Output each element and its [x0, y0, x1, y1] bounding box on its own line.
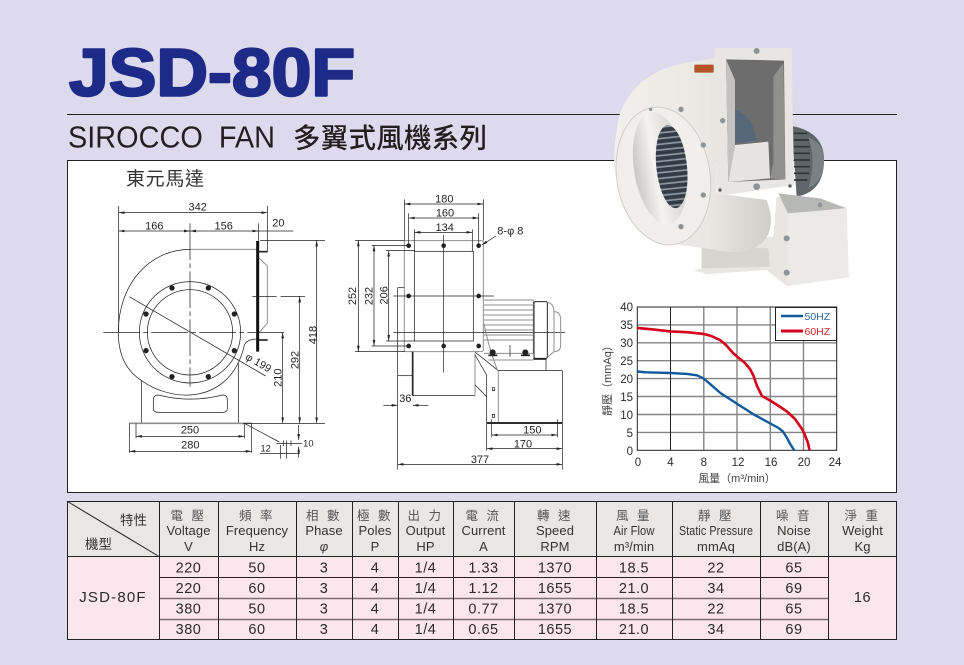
drawing: front view: 292	[289, 351, 301, 369]
legend	[776, 308, 836, 340]
header: output	[406, 509, 446, 554]
header: speed: 轉 速	[537, 508, 573, 523]
header: air flow: Air Flow	[614, 523, 655, 538]
y axis title: 靜壓（mmAq）	[600, 340, 614, 416]
header: current: A	[479, 539, 488, 554]
header: weight	[842, 508, 883, 554]
drawing: front view: 210	[272, 369, 284, 387]
row 2: 34	[707, 581, 725, 597]
curve: 60HZ	[637, 328, 810, 450]
row 3: 50	[248, 602, 266, 618]
drawing: side view: 252	[347, 287, 359, 305]
header: noise: 噪 音	[776, 508, 812, 523]
legend: 50HZ	[804, 311, 831, 323]
curve: 50HZ	[637, 372, 794, 450]
row 1: 22	[707, 560, 725, 576]
intake ring	[606, 100, 720, 252]
motor	[484, 300, 561, 371]
subtitle: SIROCCO FAN	[68, 120, 275, 154]
header: characteristic and model: 特性	[120, 513, 147, 528]
row 3	[176, 602, 803, 618]
header: characteristic and model	[85, 513, 147, 552]
heading: motor brand: 東元馬達	[126, 168, 204, 190]
row 3: 3	[320, 602, 328, 618]
row 1: 1/4	[415, 560, 436, 576]
title: JSD-80F	[69, 36, 355, 110]
header: poles: P	[371, 539, 379, 554]
header: speed: Speed	[536, 523, 574, 538]
drawing: side view: 160	[436, 208, 454, 220]
row 3: 18.5	[619, 602, 649, 618]
x axis ticks: 24	[829, 457, 842, 469]
row 3: 0.77	[468, 602, 499, 618]
row 1: 1370	[538, 560, 572, 576]
row 2: 21.0	[619, 581, 649, 597]
drawing: front view: 342	[189, 202, 207, 214]
header: weight: Kg	[854, 539, 871, 554]
row 4: 380	[176, 622, 201, 638]
header: noise	[776, 508, 812, 554]
header: output: HP	[416, 539, 435, 554]
row 3: 22	[707, 602, 725, 618]
row 4: 34	[707, 622, 725, 638]
header: noise: dB(A)	[777, 539, 811, 554]
header: static pressure	[679, 509, 753, 554]
table: specifications	[67, 501, 897, 640]
header: phase: φ	[320, 539, 329, 554]
header: voltage: Voltage	[166, 523, 211, 538]
header: poles: Poles	[358, 523, 392, 538]
row 1: 4	[371, 560, 379, 576]
row 4: 1/4	[415, 622, 436, 638]
header: characteristic and model: 機型	[85, 537, 112, 552]
row 2	[176, 581, 803, 597]
casing	[614, 57, 771, 252]
row 2: 1.12	[468, 581, 499, 597]
header: air flow: 風 量	[616, 509, 652, 523]
header: phase	[305, 509, 343, 554]
header: phase: Phase	[305, 523, 343, 538]
row 4: 1655	[538, 622, 572, 638]
y axis ticks: 5	[627, 428, 633, 440]
drawing: front view: 418	[307, 326, 319, 344]
row 2: 69	[785, 581, 803, 597]
row 3: 1/4	[415, 602, 436, 618]
outlet flange	[714, 48, 794, 196]
header: speed	[536, 508, 574, 554]
row 4: 21.0	[619, 622, 649, 638]
drawing: side view: 170	[514, 439, 532, 451]
table grid	[67, 501, 897, 640]
row 1: 1.33	[468, 560, 499, 576]
subtitle: 多翼式風機系列	[293, 122, 487, 154]
row 1: 50	[248, 560, 266, 576]
header: weight: 淨 重	[845, 508, 880, 523]
row 4: 69	[785, 622, 803, 638]
header: frequency: Hz	[249, 539, 265, 554]
model name: JSD-80F	[79, 589, 147, 606]
y axis ticks	[620, 302, 633, 458]
weight value: 16	[854, 590, 871, 606]
header: current: 電 流	[466, 509, 501, 523]
chart: fan performance curves	[600, 302, 842, 485]
row 1: 220	[176, 560, 201, 576]
x axis ticks: 20	[798, 457, 810, 469]
row 4: 4	[371, 622, 379, 638]
warning label	[694, 65, 714, 73]
header: static pressure: mmAq	[697, 539, 735, 554]
header: voltage: V	[184, 539, 193, 554]
drawing: side view: 8-φ 8	[497, 226, 523, 238]
row 2: 60	[248, 581, 266, 597]
row 3: 4	[371, 602, 379, 618]
header: frequency: 頻 率	[239, 508, 275, 523]
y axis ticks: 10	[620, 410, 633, 422]
row 4: 0.65	[468, 622, 499, 638]
y axis ticks: 40	[620, 302, 633, 314]
row 3: 1370	[538, 602, 572, 618]
row 2: 4	[371, 581, 379, 597]
drawing: side view: 206	[378, 286, 390, 304]
row 4: 3	[320, 622, 328, 638]
header: frequency: Frequency	[226, 523, 289, 538]
header: output: Output	[406, 523, 446, 538]
row 4: 60	[248, 622, 266, 638]
header: current: Current	[461, 523, 506, 538]
drawing: side view: 377	[471, 454, 489, 466]
header: static pressure: 靜 壓	[698, 509, 734, 523]
header: phase: 相 數	[306, 509, 342, 523]
row 3: 380	[176, 602, 201, 618]
heading rule	[67, 114, 897, 116]
y axis ticks: 15	[620, 392, 633, 404]
header: output: 出 力	[408, 509, 443, 523]
header: current	[461, 509, 506, 554]
header: weight: Weight	[842, 523, 883, 538]
row 1: 3	[320, 560, 328, 576]
row 2: 1655	[538, 581, 572, 597]
drawing: side view: 134	[436, 222, 454, 234]
row 3: 65	[785, 602, 803, 618]
x axis ticks	[635, 457, 842, 469]
row 2: 220	[176, 581, 201, 597]
x axis ticks: 4	[667, 457, 674, 469]
header: air flow	[614, 509, 655, 554]
stand	[694, 193, 849, 286]
photo: sirocco fan	[606, 48, 849, 286]
y axis ticks: 20	[620, 374, 633, 386]
header: poles	[357, 508, 393, 554]
table body background	[68, 556, 896, 640]
drawing: front view: 12	[260, 444, 271, 454]
y axis ticks: 25	[620, 356, 633, 368]
subtitle	[68, 120, 487, 154]
y axis ticks: 0	[627, 446, 633, 458]
row 2: 1/4	[415, 581, 436, 597]
row 1	[176, 560, 803, 576]
drawing: front view: 280	[181, 440, 199, 452]
x axis ticks: 0	[635, 457, 641, 469]
drawing: front view: 156	[215, 221, 233, 233]
motor	[792, 126, 824, 197]
row 1: 65	[785, 560, 803, 576]
y axis ticks: 35	[620, 320, 633, 332]
drawing: front view: 20	[272, 218, 284, 230]
drawing: side view	[347, 194, 565, 469]
drawing: front view: 166	[145, 221, 163, 233]
header: static pressure: Static Pressure	[679, 523, 753, 538]
header: noise: Noise	[777, 523, 811, 538]
drawing: side view: 36	[399, 393, 411, 405]
drawing: side view: 180	[435, 194, 453, 206]
drawing: front view: 250	[181, 425, 199, 437]
x axis ticks: 16	[765, 457, 777, 469]
header: speed: RPM	[540, 539, 570, 554]
drawing: side view: 150	[523, 425, 541, 437]
drawing: front view	[103, 202, 325, 459]
legend: 60HZ	[804, 326, 831, 338]
y axis ticks: 30	[620, 338, 633, 350]
row 1: 18.5	[619, 560, 649, 576]
x axis title: 風量（m³/min）	[698, 472, 776, 485]
header: voltage: 電 壓	[171, 509, 206, 523]
x axis ticks: 8	[701, 457, 707, 469]
x axis ticks: 12	[732, 457, 744, 469]
table header background	[68, 502, 896, 556]
drawing: front view: φ 199	[243, 351, 273, 375]
header: voltage	[166, 509, 211, 554]
outlet opening	[718, 48, 792, 192]
panel: drawings and chart	[68, 160, 896, 492]
header: air flow: m³/min	[614, 539, 654, 554]
row 4	[176, 622, 803, 638]
drawing: side view: 232	[363, 287, 375, 305]
header: frequency	[226, 508, 289, 554]
row 2: 3	[320, 581, 328, 597]
header: poles: 極 數	[357, 508, 393, 523]
drawing: front view: 10	[303, 439, 314, 449]
